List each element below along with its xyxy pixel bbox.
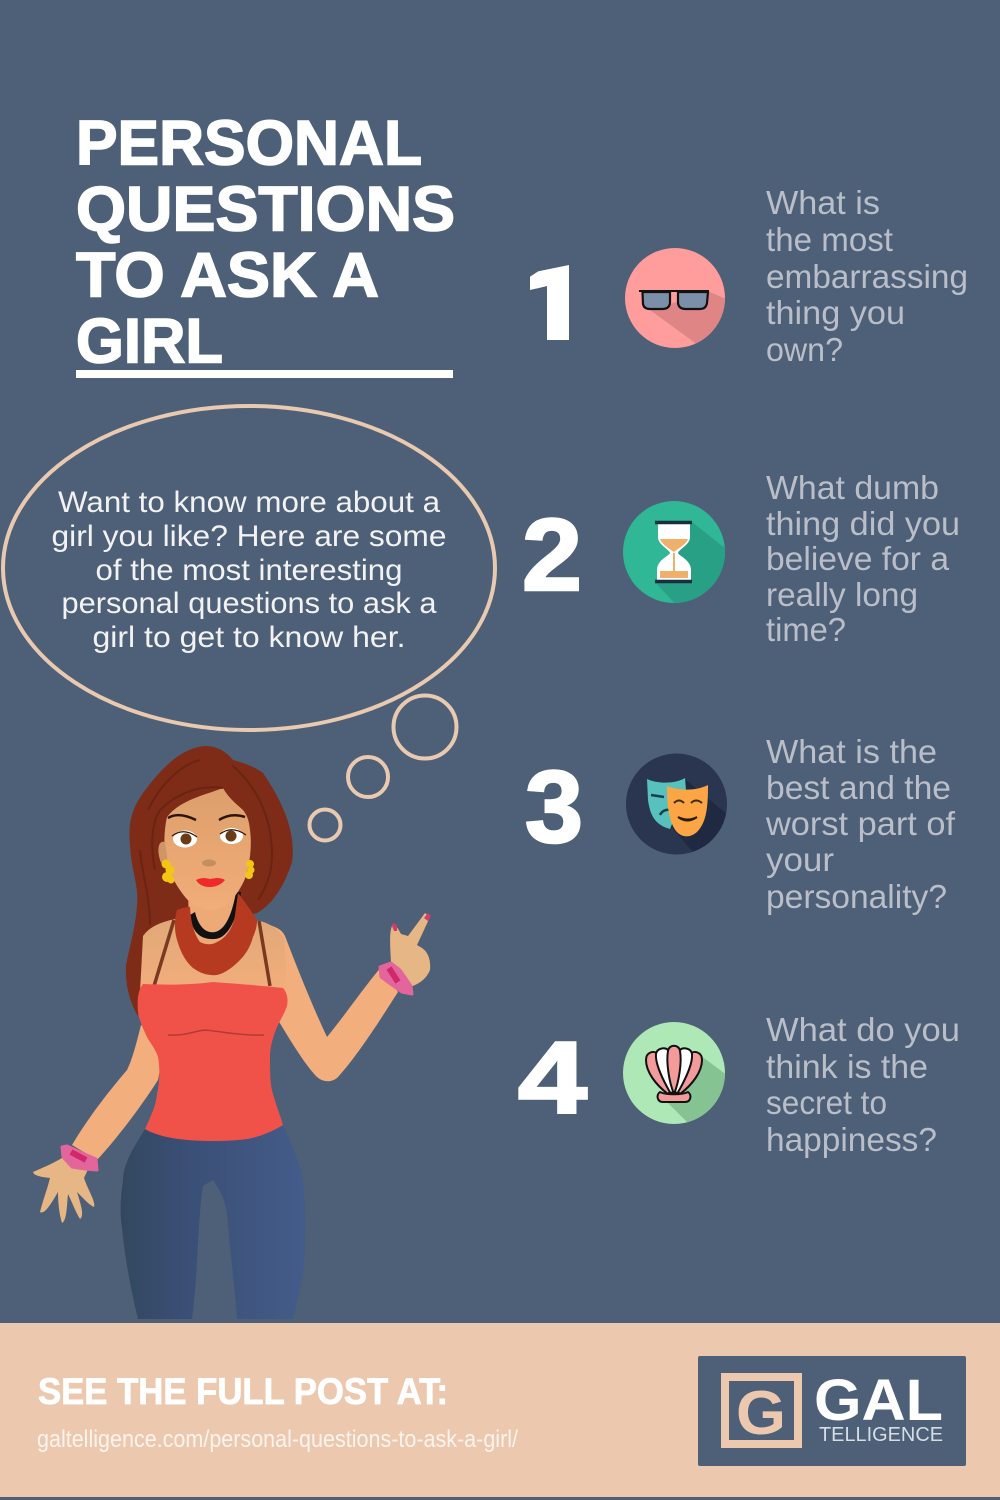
question 4: happiness? (766, 1121, 937, 1158)
right arm (270, 925, 398, 1081)
question 2: believe for a (766, 540, 950, 577)
question 1: the most (766, 221, 893, 258)
left scrunchie (62, 1146, 97, 1170)
jeans (121, 1125, 305, 1319)
title (76, 108, 455, 378)
title: PERSONAL (76, 108, 422, 178)
icon: hourglass (623, 501, 725, 603)
lips (196, 878, 225, 887)
nails (392, 913, 431, 931)
earrings (162, 860, 254, 884)
title: QUESTIONS (76, 174, 455, 244)
hair strands (140, 760, 272, 925)
logo (698, 1356, 966, 1466)
woman illustration (33, 746, 431, 1319)
intro text: Want to know more about a (58, 486, 440, 519)
question 4: secret to (766, 1084, 887, 1121)
logo: G (736, 1379, 786, 1448)
shoulders and chest (140, 919, 288, 992)
left hand (33, 1158, 94, 1223)
question 3: your (766, 841, 834, 878)
intro text: of the most interesting (96, 554, 402, 587)
ear (158, 842, 168, 865)
thought bubble (3, 406, 495, 840)
question 1: embarrassing (766, 258, 968, 295)
title: TO ASK A (76, 240, 379, 310)
question 4: What do you (766, 1011, 960, 1048)
icon: glasses (625, 248, 725, 348)
question 2: thing did you (766, 505, 960, 542)
number 1: 1 (529, 248, 586, 362)
question 2: really long (766, 576, 918, 613)
step 2 (522, 469, 960, 648)
question 3: personality? (766, 878, 947, 915)
question 3: What is the (766, 733, 937, 770)
intro text: girl you like? Here are some (52, 520, 446, 553)
question 1: What is (766, 184, 880, 221)
top seam (168, 1030, 264, 1035)
face (164, 788, 251, 910)
question 3 (765, 733, 956, 915)
question 2: time? (766, 611, 846, 648)
intro text (52, 486, 446, 654)
step 4 (518, 1011, 960, 1158)
question 1 (766, 184, 968, 368)
footer url: galtelligence.com/personal-questions-to-ask-a-girl/ (37, 1426, 518, 1453)
scarf (175, 893, 257, 975)
number 4: 4 (518, 1021, 587, 1135)
hair back (126, 746, 293, 1016)
logo: GAL (814, 1368, 943, 1433)
intro text: personal questions to ask a (62, 587, 437, 620)
icon: seashell (623, 1022, 725, 1124)
title: GIRL (76, 306, 223, 376)
eyebrows (168, 815, 245, 820)
question 2 (766, 469, 960, 648)
eyes (172, 828, 246, 848)
step 3 (525, 733, 956, 915)
top (138, 982, 288, 1141)
left arm (72, 1025, 165, 1160)
number 2: 2 (522, 498, 582, 612)
question 1: thing you (766, 294, 905, 331)
icon: theatre masks (626, 754, 727, 854)
footer band (0, 1323, 1000, 1497)
logo: TELLIGENCE (819, 1424, 943, 1446)
nose (202, 860, 216, 866)
question 1: own? (766, 331, 843, 368)
intro text: girl to get to know her. (92, 621, 406, 654)
question 2: What dumb (766, 469, 939, 506)
right scrunchie (380, 963, 412, 994)
question 3: worst part of (765, 805, 956, 842)
right hand (380, 913, 430, 990)
scrunchie accents (71, 968, 398, 1160)
question 3: best and the (766, 769, 951, 806)
step 1 (529, 184, 968, 368)
number 3: 3 (525, 750, 583, 864)
footer heading: SEE THE FULL POST AT: (38, 1371, 448, 1412)
neck (188, 890, 240, 950)
straps (154, 920, 270, 986)
necklace (190, 892, 241, 939)
question 4 (766, 1011, 960, 1158)
question 4: think is the (766, 1048, 928, 1085)
